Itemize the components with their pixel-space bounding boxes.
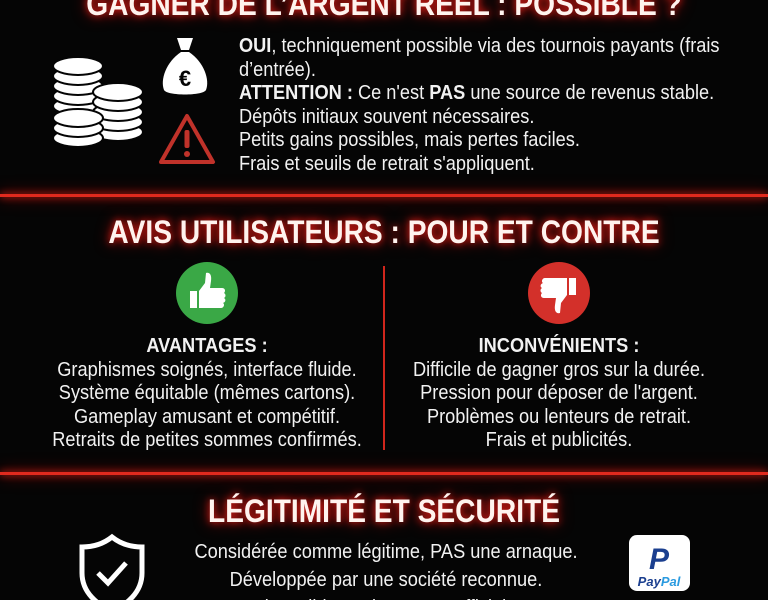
divider [383, 266, 385, 450]
text block: legitimite [194, 541, 578, 600]
title: avis utilisateurs: AVIS UTILISATEURS : POUR ET CONTRE [108, 214, 660, 250]
icon: paypal: PayPal [638, 574, 681, 589]
text block: earnings: Dépôts initiaux souvent nécessaires. [239, 106, 534, 128]
list: inconvenients [413, 334, 705, 451]
icon: shield check [80, 534, 144, 600]
list: avantages: Système équitable (mêmes cartons). [59, 382, 355, 404]
icon: warning triangle [159, 114, 216, 164]
text block: earnings: ATTENTION : Ce n'est PAS une source de revenus stable. [239, 82, 714, 104]
icon: paypal [629, 535, 690, 591]
text block: legitimite: Développée par une société reconnue. [230, 569, 542, 591]
text block: earnings: Petits gains possibles, mais pertes faciles. [239, 129, 580, 151]
icon: paypal: P [649, 543, 670, 576]
list: inconvenients: Frais et publicités. [486, 429, 632, 451]
icon: money bag euro: € [179, 66, 191, 91]
list: avantages: Retraits de petites sommes confirmés. [52, 429, 362, 451]
text block: earnings: d’entrée). [239, 58, 316, 80]
title: legitimite: LÉGITIMITÉ ET SÉCURITÉ [208, 493, 560, 529]
text block: earnings [239, 35, 720, 174]
list: avantages: AVANTAGES : [146, 335, 268, 357]
icon: coins stack [54, 58, 142, 146]
icon: thumbs down [528, 262, 590, 324]
list: inconvenients: Pression pour déposer de l'argent. [420, 382, 698, 404]
list: avantages: Gameplay amusant et compétitif. [74, 406, 340, 428]
text block: legitimite: Considérée comme légitime, PAS une arnaque. [194, 541, 578, 563]
list: inconvenients: INCONVÉNIENTS : [479, 335, 639, 357]
text block: earnings: OUI, techniquement possible via des tournois payants (frais [239, 35, 720, 57]
icon: money bag euro [162, 38, 208, 94]
list: avantages: Graphismes soignés, interface fluide. [57, 358, 357, 380]
text block: earnings: Frais et seuils de retrait s'appliquent. [239, 152, 535, 174]
list: inconvenients: Problèmes ou lenteurs de retrait. [427, 406, 691, 428]
list: avantages [52, 335, 362, 451]
list: inconvenients: Difficile de gagner gros sur la durée. [413, 358, 705, 380]
icon: thumbs up [176, 262, 238, 324]
